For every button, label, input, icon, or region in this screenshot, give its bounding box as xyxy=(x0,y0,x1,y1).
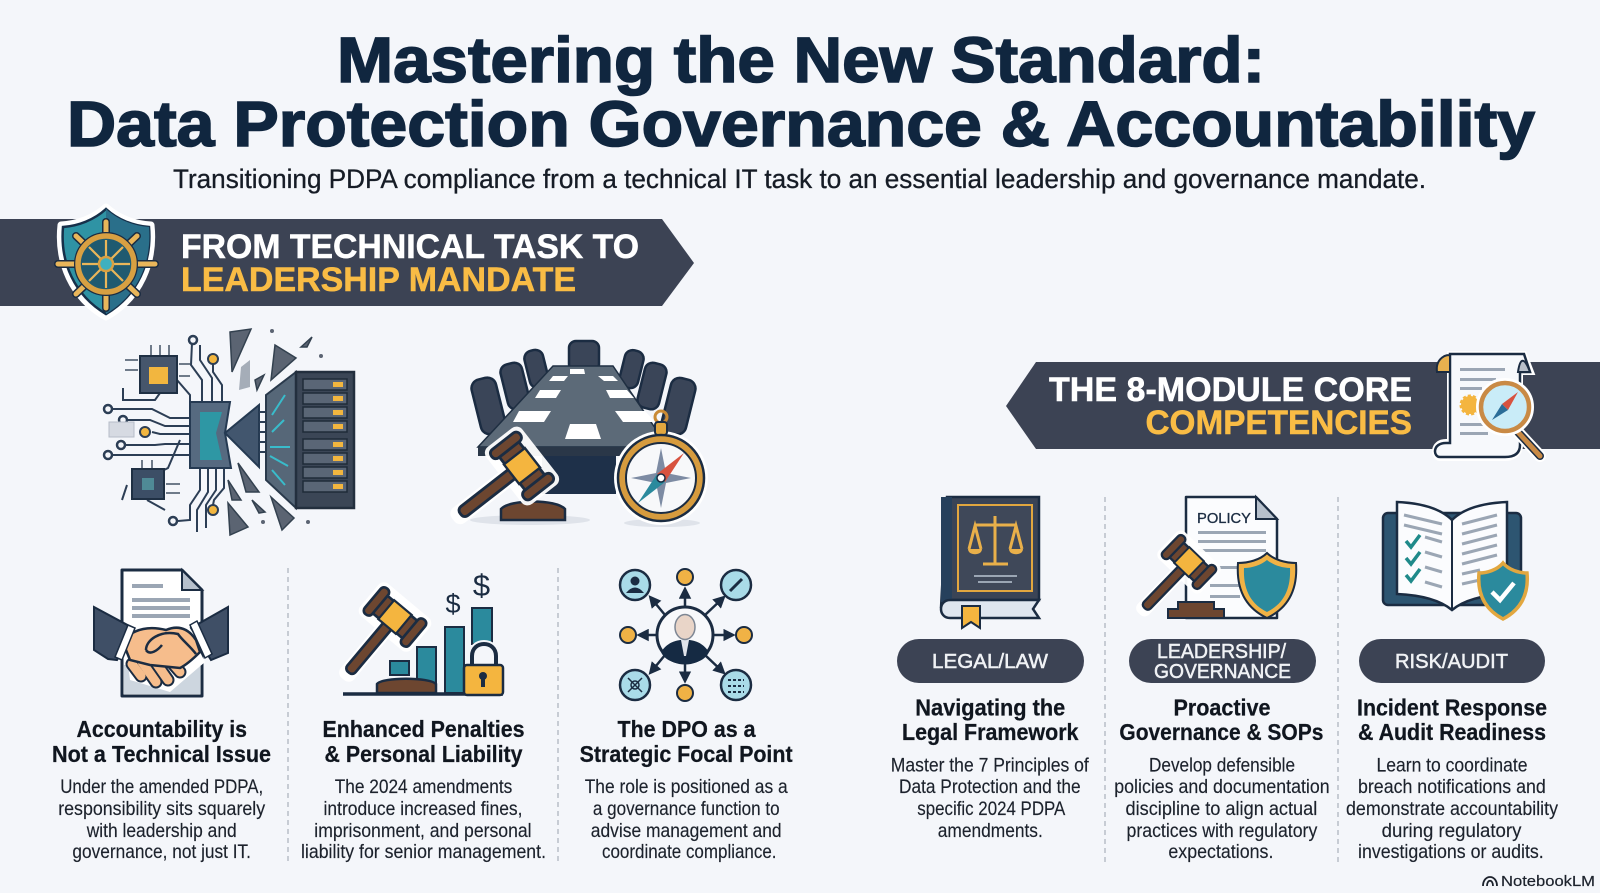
heading xyxy=(52,716,271,767)
icon: gavel, rising bars and padlock xyxy=(317,568,503,701)
panel: incident response xyxy=(1346,502,1558,863)
body text: discipline to align actual xyxy=(1126,798,1317,820)
heading: Governance & SOPs xyxy=(1119,719,1323,745)
panel: legal framework xyxy=(891,497,1089,842)
icon: policy document, gavel and shield xyxy=(1118,497,1296,634)
body text xyxy=(58,776,265,863)
divider xyxy=(287,568,289,862)
panel: enhanced penalties xyxy=(301,568,546,863)
body text: governance, not just IT. xyxy=(72,841,251,863)
body text: Under the amended PDPA, xyxy=(60,776,263,798)
icon: scroll and magnifier xyxy=(1435,354,1540,458)
watermark: NotebookLM: NotebookLM xyxy=(1501,873,1595,890)
heading: & Personal Liability xyxy=(324,741,523,767)
body text: a governance function to xyxy=(593,798,780,820)
heading xyxy=(1119,694,1323,745)
category pill: legal/law xyxy=(897,639,1084,683)
heading: Accountability is xyxy=(76,716,247,742)
heading xyxy=(1357,694,1547,745)
panel: accountability xyxy=(52,570,271,863)
category pill: legal/law: LEGAL/LAW xyxy=(932,651,1048,673)
body text: imprisonment, and personal xyxy=(314,820,532,842)
body text: Develop defensible xyxy=(1149,754,1295,776)
heading: Legal Framework xyxy=(902,719,1079,745)
body text: amendments. xyxy=(938,820,1043,842)
body text: expectations. xyxy=(1168,841,1273,863)
banner: the 8-module core competencies: THE 8-MODULE CORE xyxy=(1049,371,1412,409)
heading: Strategic Focal Point xyxy=(580,741,793,767)
body text: responsibility sits squarely xyxy=(58,798,265,820)
category pill: risk/audit: RISK/AUDIT xyxy=(1395,651,1508,673)
body text: The 2024 amendments xyxy=(335,776,513,798)
icon: handshake over document xyxy=(94,570,228,696)
panel: proactive governance xyxy=(1114,497,1330,863)
heading: Not a Technical Issue xyxy=(52,741,271,767)
icon: DPO hub network xyxy=(620,569,752,701)
body text xyxy=(891,754,1089,842)
body text: introduce increased fines, xyxy=(324,798,522,820)
icon: gavel, rising bars and padlock: $ xyxy=(445,589,461,619)
body text xyxy=(585,776,788,863)
body text xyxy=(1114,754,1330,863)
body text: demonstrate accountability xyxy=(1346,798,1558,820)
icon: open book, checklist and shield xyxy=(1383,502,1527,619)
banner: the 8-module core competencies xyxy=(1006,354,1600,458)
body text: coordinate compliance. xyxy=(602,841,776,863)
body text xyxy=(1346,754,1558,863)
banner: from technical task to leadership mandate xyxy=(0,207,694,317)
category pill: leadership/governance: GOVERNANCE xyxy=(1154,661,1291,683)
heading: The DPO as a xyxy=(618,716,756,742)
body text: investigations or audits. xyxy=(1358,841,1544,863)
body text xyxy=(301,776,546,863)
category pill: leadership/governance: LEADERSHIP/ xyxy=(1157,641,1286,663)
illustration: boardroom table with gavel and compass xyxy=(431,341,708,548)
icon: policy document, gavel and shield: POLICY xyxy=(1197,510,1251,527)
illustration: circuit breaking into server xyxy=(104,329,354,535)
heading: Enhanced Penalties xyxy=(322,716,524,742)
body text: policies and documentation xyxy=(1114,776,1330,798)
divider xyxy=(1337,497,1339,862)
icon: shield with ship wheel xyxy=(58,207,155,317)
title: Mastering the New Standard: xyxy=(337,24,1265,96)
title: Data Protection Governance & Accountability xyxy=(67,88,1535,160)
category pill: risk/audit xyxy=(1359,639,1545,683)
banner: from technical task to leadership mandate: FROM TECHNICAL TASK TO xyxy=(181,228,639,266)
body text: The role is positioned as a xyxy=(585,776,788,798)
body text: with leadership and xyxy=(86,820,237,842)
heading xyxy=(580,716,793,767)
icon: law book with scales xyxy=(941,497,1039,628)
body text: Learn to coordinate xyxy=(1376,754,1528,776)
divider xyxy=(1104,497,1106,862)
category pill: leadership/governance xyxy=(1129,639,1316,683)
subtitle: Transitioning PDPA compliance from a technical IT task to an essential leadership and governance mandate. xyxy=(173,164,1426,194)
body text: Data Protection and the xyxy=(899,776,1081,798)
divider xyxy=(557,568,559,862)
body text: during regulatory xyxy=(1382,820,1522,842)
body text: practices with regulatory xyxy=(1126,820,1318,842)
heading xyxy=(322,716,524,767)
icon: gavel, rising bars and padlock: $ xyxy=(473,568,490,603)
body text: specific 2024 PDPA xyxy=(917,798,1065,820)
banner: the 8-module core competencies: COMPETENCIES xyxy=(1146,404,1412,442)
heading: Navigating the xyxy=(915,694,1065,720)
heading xyxy=(902,694,1079,745)
body text: liability for senior management. xyxy=(301,841,546,863)
banner: from technical task to leadership mandate: LEADERSHIP MANDATE xyxy=(181,261,576,299)
body text: breach notifications and xyxy=(1358,776,1546,798)
heading: Proactive xyxy=(1174,694,1270,720)
panel: the DPO xyxy=(580,569,793,863)
body text: advise management and xyxy=(591,820,782,842)
heading: Incident Response xyxy=(1357,694,1547,720)
heading: & Audit Readiness xyxy=(1358,719,1546,745)
body text: Master the 7 Principles of xyxy=(891,754,1089,776)
title xyxy=(67,24,1535,160)
